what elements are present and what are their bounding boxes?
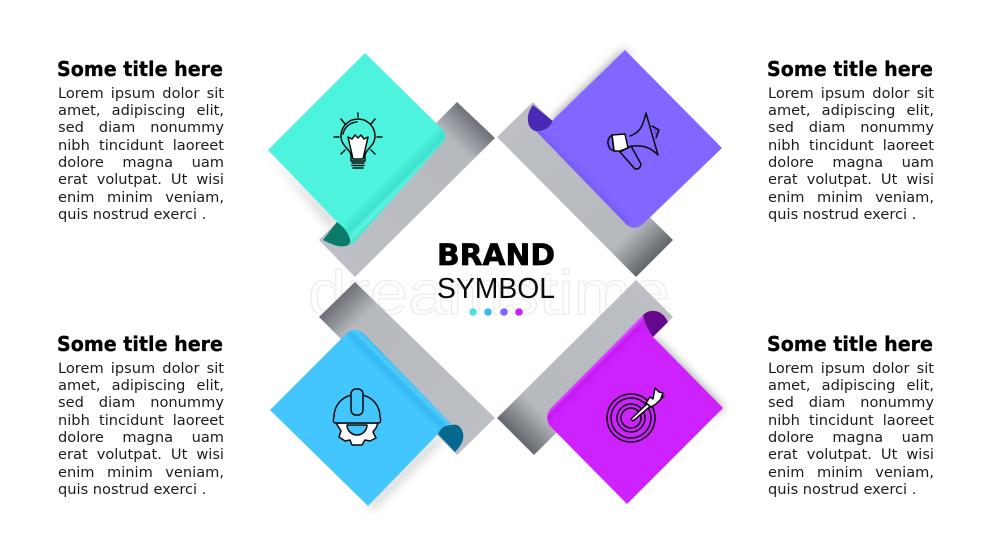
body text: enim minim veniam, — [768, 189, 934, 206]
body text: quis nostrud exerci . — [768, 481, 916, 498]
body text: amet, adipiscing elit, — [58, 102, 224, 119]
body text — [58, 84, 224, 223]
body text: quis nostrud exerci . — [768, 206, 916, 223]
body text: Lorem ipsum dolor sit — [58, 360, 224, 376]
text block: top left — [57, 58, 224, 223]
text block: bottom left — [57, 333, 224, 498]
body text: dolore magna uam — [58, 154, 224, 171]
body text: dolore magna uam — [768, 154, 934, 171]
panel: purple backing band — [497, 102, 673, 277]
body text: enim minim veniam, — [58, 189, 224, 206]
icon: target with arrow — [607, 388, 664, 442]
body text — [58, 360, 224, 498]
panel: teal backing band — [319, 102, 495, 277]
body text: sed diam nonummy — [58, 119, 224, 136]
body text — [768, 360, 934, 498]
body text: dolore magna uam — [768, 429, 934, 446]
watermark: dreamstime — [308, 259, 670, 328]
body text: nibh tincidunt laoreet — [768, 412, 934, 429]
panel: teal card — [268, 53, 445, 246]
text block: top right — [767, 58, 934, 223]
body text — [768, 84, 934, 223]
body text: nibh tincidunt laoreet — [58, 412, 224, 429]
body text: quis nostrud exerci . — [58, 481, 206, 498]
body text: Lorem ipsum dolor sit — [768, 84, 934, 102]
panel: magenta backing band — [497, 280, 673, 455]
body text: erat volutpat. Ut wisi — [768, 171, 934, 188]
body text: quis nostrud exerci . — [58, 206, 206, 223]
body text: sed diam nonummy — [768, 119, 934, 136]
body text: sed diam nonummy — [58, 394, 224, 411]
body text: sed diam nonummy — [768, 394, 934, 411]
body text: amet, adipiscing elit, — [58, 377, 224, 394]
body text: amet, adipiscing elit, — [768, 377, 934, 394]
body text: dolore magna uam — [58, 429, 224, 446]
brand title: BRAND — [437, 238, 555, 272]
icon: megaphone — [608, 113, 659, 169]
panel: blue card — [270, 330, 463, 510]
body text: Lorem ipsum dolor sit — [768, 360, 934, 376]
colour dots — [469, 308, 523, 316]
body text: nibh tincidunt laoreet — [768, 137, 934, 154]
body text: enim minim veniam, — [58, 464, 224, 481]
panel: magenta card — [547, 311, 723, 504]
body text: Lorem ipsum dolor sit — [58, 84, 224, 102]
body text: erat volutpat. Ut wisi — [768, 446, 934, 463]
text block: bottom right — [767, 333, 934, 498]
body text: nibh tincidunt laoreet — [58, 137, 224, 154]
body text: enim minim veniam, — [768, 464, 934, 481]
body text: erat volutpat. Ut wisi — [58, 171, 224, 188]
icon: helmet and gear — [333, 389, 381, 445]
icon: light bulb — [334, 113, 382, 168]
brand subtitle: SYMBOL — [437, 273, 555, 305]
panel: blue backing band — [319, 282, 495, 455]
body text: amet, adipiscing elit, — [768, 102, 934, 119]
panel: purple card — [528, 50, 722, 228]
body text: erat volutpat. Ut wisi — [58, 446, 224, 463]
